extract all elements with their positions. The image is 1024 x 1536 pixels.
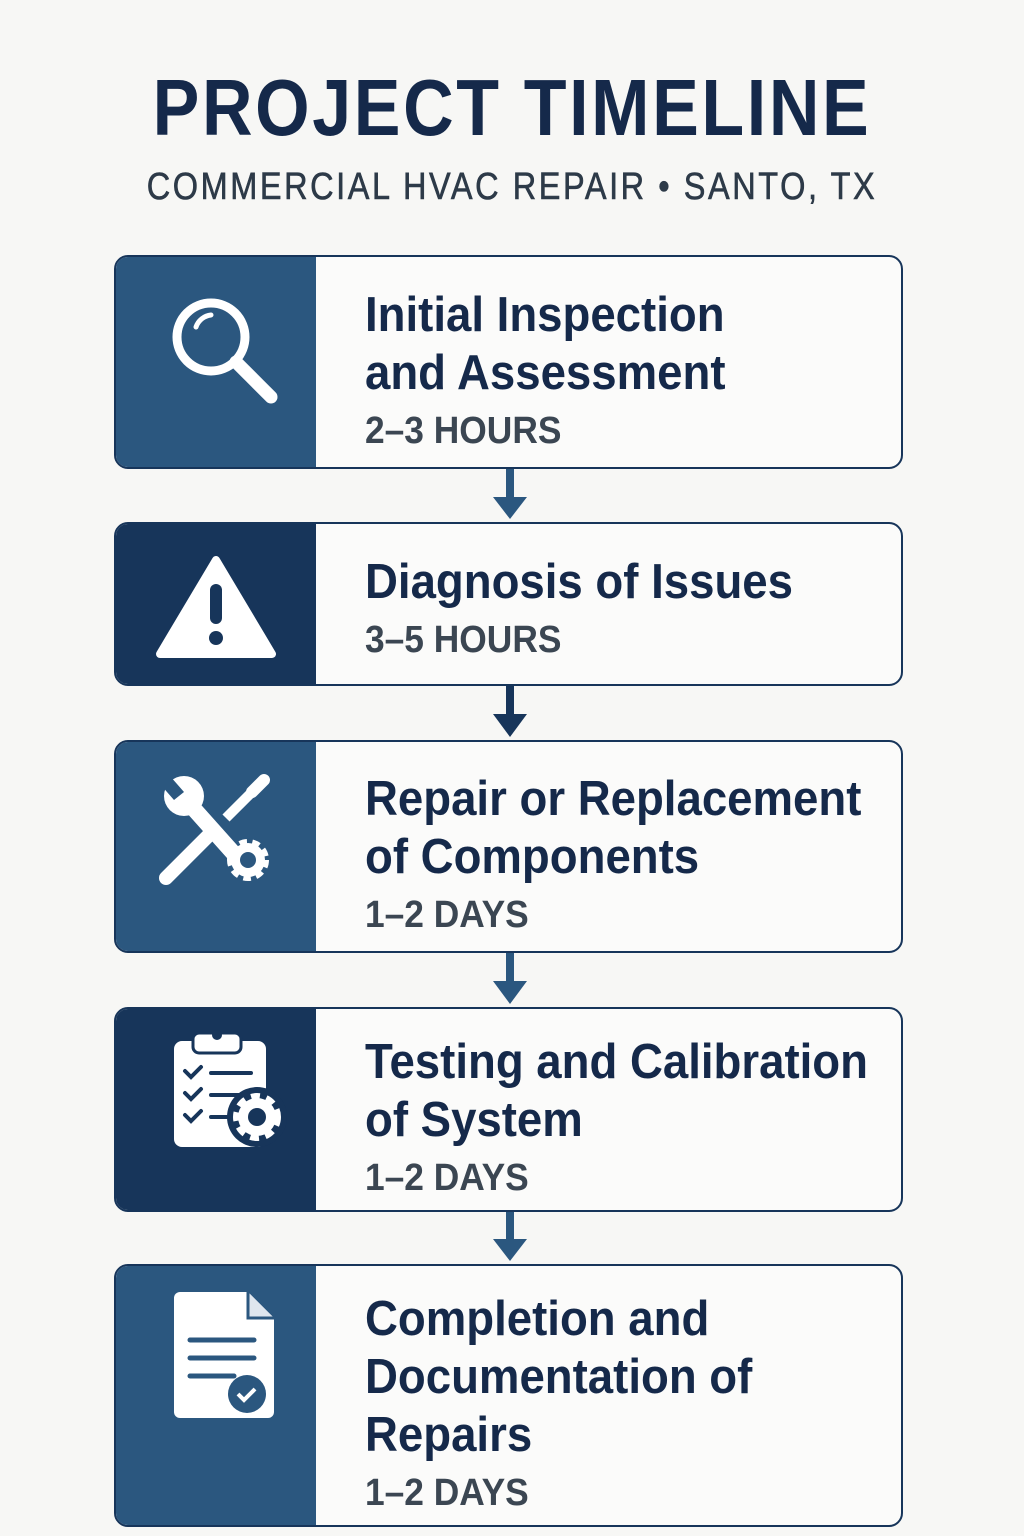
arrow 1 (493, 469, 527, 519)
text: step 5: Documentation of (365, 1350, 752, 1404)
text: step 3: Repair or Replacement (365, 772, 861, 826)
arrow 4 (493, 1212, 527, 1261)
card: diagnosis (114, 522, 903, 686)
text: step 5 (365, 1292, 752, 1514)
card: testing (114, 1007, 903, 1212)
card: repair (114, 740, 903, 953)
text: step 5: Completion and (365, 1292, 709, 1346)
text: step 2: 3–5 HOURS (365, 619, 561, 661)
text: step 3: 1–2 DAYS (365, 894, 529, 936)
text: step 4: 1–2 DAYS (365, 1157, 529, 1199)
text: step 3 (365, 772, 861, 936)
text: step 2 (365, 555, 793, 661)
text: step 2: Diagnosis of Issues (365, 555, 793, 609)
subtitle: COMMERCIAL HVAC REPAIR • SANTO, TX (147, 166, 877, 208)
icon panel: document check (116, 1266, 316, 1525)
title: PROJECT TIMELINE (153, 63, 871, 152)
text: step 4: of System (365, 1093, 583, 1147)
text: step 5: Repairs (365, 1408, 532, 1462)
text: step 1 (365, 288, 725, 452)
icon panel: magnifier (116, 257, 316, 467)
icon panel: clipboard gear (116, 1009, 316, 1210)
card: initial inspection (114, 255, 903, 469)
text: step 4 (365, 1035, 868, 1199)
text: step 1: Initial Inspection (365, 288, 725, 342)
text: step 4: Testing and Calibration (365, 1035, 868, 1089)
card: completion (114, 1264, 903, 1527)
arrow 2 (493, 686, 527, 737)
icon panel: warning (116, 524, 316, 684)
text: step 1: 2–3 HOURS (365, 410, 561, 452)
text: step 1: and Assessment (365, 346, 725, 400)
text: step 5: 1–2 DAYS (365, 1472, 529, 1514)
icon panel: tools (116, 742, 316, 951)
text: step 3: of Components (365, 830, 699, 884)
arrow 3 (493, 953, 527, 1004)
